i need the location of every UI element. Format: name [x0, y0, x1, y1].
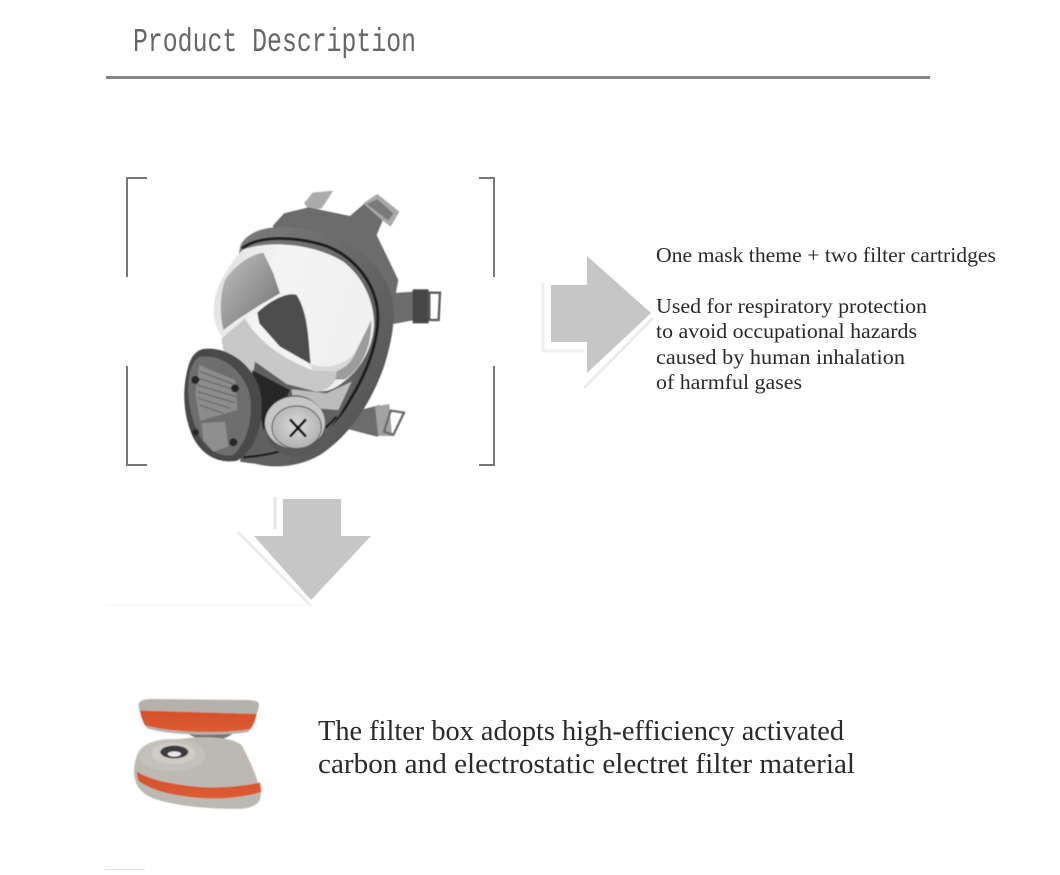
harness straps: [273, 204, 415, 437]
mask chin body: [240, 362, 359, 464]
lower cartridge: [134, 737, 261, 809]
large front filter cover: [184, 349, 262, 461]
black seal: [242, 238, 378, 457]
filter description: carbon and electrostatic electret filter material: [318, 749, 855, 780]
icon: filter cartridges: [134, 699, 261, 809]
filter description: [318, 716, 855, 780]
lower buckle: [375, 404, 404, 436]
mask frame: [223, 227, 394, 466]
title underline: [106, 76, 930, 79]
description text: of harmful gases: [656, 370, 802, 394]
side buckle: [413, 289, 440, 323]
chin seal: [243, 417, 337, 457]
down arrow: [106, 497, 371, 606]
bottom residual stroke: [105, 869, 145, 870]
right arrow: [543, 256, 653, 388]
side filter port with X: [264, 395, 326, 457]
description text: One mask theme + two filter cartridges: [656, 243, 996, 267]
description text: to avoid occupational hazards: [656, 319, 917, 343]
upper cartridge: [139, 699, 259, 740]
filter description: The filter box adopts high-efficiency activated: [318, 716, 844, 747]
description text: Used for respiratory protection: [656, 294, 928, 318]
top strap buckles: [304, 191, 399, 227]
visor: [214, 244, 374, 393]
description text: caused by human inhalation: [656, 345, 906, 369]
description text: [656, 243, 996, 394]
icon: full-face gas mask: [184, 191, 440, 466]
title: Product Description: [133, 24, 416, 61]
visor interior reflections: [221, 253, 371, 380]
nose cup: [222, 318, 337, 393]
image frame brackets: [127, 178, 494, 465]
